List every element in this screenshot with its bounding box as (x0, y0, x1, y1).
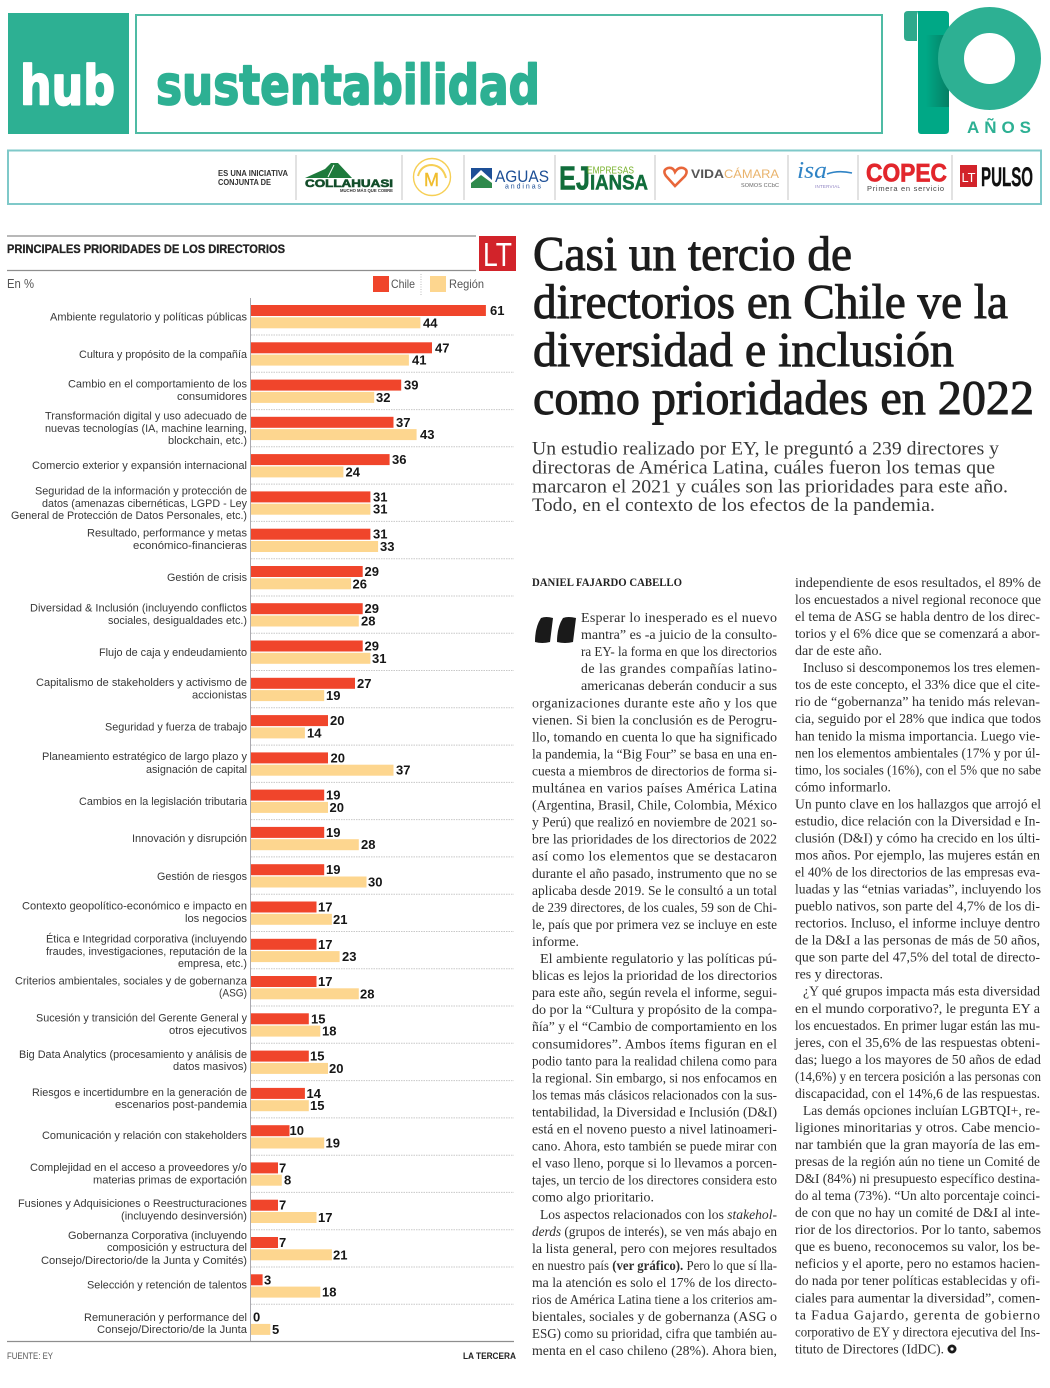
paragraph: Las demás opciones: D&I (84%) ni presupuesto específico destina- (795, 1172, 1040, 1187)
row: Riesgos e incertidumbre: Riesgos e incertidumbre en la generación de (32, 1087, 247, 1099)
row: Innovación y disrupción (132, 825, 375, 852)
paragraph: Las demás opciones: presas de la región aún no tiene un Comité de (795, 1155, 1040, 1170)
row: Selección y retención: Selección y retención de talentos (87, 1280, 247, 1292)
paragraph: Esperar lo inesperado: organizaciones durante este año y los que (532, 696, 777, 711)
paragraph: Un punto clave: luadas y las “etnias variadas”, incluyendo los (795, 883, 1041, 898)
row: Gobernanza Corporativa: Gobernanza Corporativa (incluyendo (68, 1230, 247, 1242)
row: Cambio en el comportamiento: 39 (404, 378, 418, 393)
paragraph: Esperar lo inesperado: americanas deberán conducir a sus (581, 679, 777, 694)
panel: bar chart of board priorities (7, 236, 516, 1361)
paragraph: Los aspectos relacionados: ma la atención es solo el 17% de los directo- (532, 1276, 777, 1291)
paragraph: El ambiente regulatorio: do por la “Cultura y propósito de la compa- (532, 1003, 777, 1018)
row: Gobernanza Corporativa: composición y estructura del (107, 1242, 247, 1254)
paragraph: Incluso si descomponemos: nen los elementos ambientales (17% y por úl- (795, 746, 1040, 761)
legend: Chile (391, 277, 415, 291)
row: Cambio en el comportamiento: Cambio en el comportamiento de los (68, 378, 247, 390)
row: Criterios ambientales: Criterios ambientales, sociales y de gobernanza (15, 976, 248, 988)
logo: Empresas Iansa: EJ (559, 160, 590, 196)
paragraph: Y qué grupos impacta: los encuestados. En primer lugar están las mu- (795, 1019, 1040, 1034)
paragraph: Esperar lo inesperado: (Argentina, Brasil, Chile, Colombia, México (532, 799, 777, 814)
row: Remuneración y performance: Consejo/Directorio/de la Junta (97, 1324, 248, 1336)
row: Planeamiento estratégico: Planeamiento estratégico de largo plazo y (42, 751, 247, 763)
row: Transformación digital: Transformación digital y uso adecuado de (45, 410, 247, 422)
paragraph: Esperar lo inesperado: mantra” es -a juicio de la consulto- (581, 628, 777, 643)
paragraph: El ambiente regulatorio: el vaso lleno, porque si lo llevamos a porcen- (532, 1157, 777, 1172)
row: Transformación digital (45, 410, 434, 447)
row: Gobernanza Corporativa: 7 (279, 1235, 286, 1250)
logo: ISA Intervial: INTERVIAL (815, 184, 840, 189)
paragraph: El ambiente regulatorio: blicas es lejos la prioridad de los directorios (532, 969, 777, 984)
row: Innovación y disrupción: 28 (361, 837, 375, 852)
header: hub sustentabilidad banner (8, 11, 1031, 137)
row: Fusiones y Adquisiciones: (incluyendo desinversión) (121, 1210, 247, 1222)
row: Gestión de riesgos: Gestión de riesgos (157, 871, 247, 883)
row: Cambios en la legislación: 19 (326, 788, 340, 803)
paragraph: Los aspectos relacionados: en nuestro país (ver gráfico). Pero lo que sí lla- (532, 1259, 777, 1274)
headline: Casi un tercio de (533, 226, 852, 281)
row: Gestión de riesgos (157, 862, 382, 890)
paragraph: Esperar lo inesperado (532, 611, 778, 950)
paragraph: Las demás opciones: Las demás opciones incluían LGBTQI+, re- (803, 1104, 1040, 1119)
logo: ISA Intervial (797, 158, 852, 189)
paragraph: El ambiente regulatorio: para este año, según revela el informe, segui- (532, 986, 777, 1001)
row: Innovación y disrupción: 19 (326, 825, 340, 840)
row: Big Data Analytics: 15 (310, 1049, 324, 1064)
row: Riesgos e incertidumbre (32, 1086, 324, 1113)
row: Gestión de riesgos: 30 (368, 874, 382, 890)
row: Sucesión y transición: 15 (311, 1011, 325, 1026)
row: Big Data Analytics: datos masivos) (173, 1061, 247, 1073)
hub logo box (8, 13, 129, 134)
paragraph: Esperar lo inesperado: durante el año pasado, instrumento que no se (532, 867, 777, 882)
row: Complejidad en el acceso (30, 1160, 291, 1188)
logo: Empresas Iansa: EMPRESAS (587, 166, 634, 176)
row: Ética e Integridad: empresa, etc.) (178, 958, 247, 970)
paragraph: Los aspectos relacionados: Los aspectos relacionados con los stakehol- (540, 1208, 777, 1223)
row: Remuneración y performance: Remuneración y performance del (84, 1312, 247, 1324)
logo: Collahuasi: COLLAHUASI (305, 178, 393, 190)
logo: Empresas Iansa (559, 160, 648, 196)
paragraph: Incluso si descomponemos: cia, seguido por el 28% que indica que todos (795, 712, 1041, 727)
row: Seguridad y fuerza de trabajo: 14 (307, 725, 322, 740)
paragraph: Un punto clave: que son parte del 47,5% del total de directo- (795, 951, 1040, 966)
row: Comunicación y relación: 10 (290, 1123, 304, 1138)
paragraph: Esperar lo inesperado: aplicaba desde 2019. Se le consultó a un total (532, 884, 777, 899)
row: Cultura y propósito: 41 (412, 353, 426, 368)
paragraph: El ambiente regulatorio: cano. Ahora, esto también se puede mirar con (532, 1140, 777, 1155)
paragraph: Los aspectos relacionados: derds (grupos de interés), se ven más abajo en (532, 1225, 777, 1240)
logo: LT Pulso: LT (962, 170, 976, 185)
sustentabilidad title box: sustentabilidad (156, 54, 540, 117)
row: Capitalismo de stakeholders (36, 676, 371, 703)
subheading: directoras de América Latina, cuáles fueron los temas que (532, 458, 995, 478)
row: Planeamiento estratégico (42, 750, 410, 778)
paragraph: independiente de esos resultados: dar de este año. (795, 644, 882, 659)
row: Remuneración y performance (84, 1310, 279, 1337)
paragraph: Un punto clave: pueblo nativos, son parte del 4,7% de los di- (795, 900, 1040, 915)
logo: Aguas Andinas (471, 168, 549, 190)
legend (373, 274, 484, 296)
paragraph: Incluso si descomponemos: Incluso si descomponemos los tres elemen- (803, 661, 1040, 676)
logo: McDonald's arches: M (424, 170, 439, 190)
row: Seguridad de la información: 31 (373, 489, 387, 504)
paragraph: El ambiente regulatorio: tajes, un tercio de los directores considera esto (532, 1174, 777, 1189)
row: Ética e Integridad: Ética e Integridad corporativa (incluyendo (46, 932, 247, 946)
paragraph: Y qué grupos impacta: das; luego a los mayores de 50 años de edad (795, 1053, 1041, 1068)
row: Ética e Integridad (46, 932, 356, 970)
text: es una iniciativa conjunta de (218, 168, 288, 187)
paragraph: El ambiente regulatorio (532, 952, 778, 1206)
row: Complejidad en el acceso: 8 (284, 1173, 291, 1188)
paragraph: Y qué grupos impacta: jeres, con el 35,6% de las respuestas obteni- (794, 1036, 1040, 1051)
paragraph: Las demás opciones: do al tema (73%). “Un alto porcentaje coinci- (795, 1189, 1040, 1204)
row: Gestión de crisis: 26 (352, 576, 367, 591)
row: Transformación digital: 37 (396, 415, 410, 430)
row: Transformación digital: nuevas tecnologías (IA, machine learning, (45, 423, 247, 435)
row: Resultado, performance (87, 527, 394, 554)
paragraph: Un punto clave: el 40% de los directorios de las empresas eva- (795, 866, 1040, 881)
logo: LT Pulso (960, 162, 1033, 192)
text: es una iniciativa conjunta de: CONJUNTA DE (218, 177, 271, 187)
paragraph: Las demás opciones: nar también que la gran mayoría de las em- (795, 1138, 1040, 1153)
row: Sucesión y transición: 18 (322, 1024, 336, 1039)
row: Fusiones y Adquisiciones (18, 1198, 332, 1225)
row: Comercio exterior: 24 (346, 464, 361, 479)
paragraph: independiente de esos resultados: los encuestados a nivel regional reconoce que (795, 593, 1041, 608)
article text: second column (794, 576, 1041, 1357)
headline: como prioridades en 2022 (533, 370, 1034, 425)
row: Flujo de caja (99, 638, 386, 666)
paragraph: independiente de esos resultados: torios y el 6% dice que se comenzará a abor- (795, 627, 1040, 642)
row: Seguridad y fuerza de trabajo: Seguridad y fuerza de trabajo (105, 722, 247, 734)
row: Flujo de caja: Flujo de caja y endeudamiento (99, 647, 247, 659)
row: Resultado, performance: 31 (373, 527, 387, 542)
row: Seguridad de la información: datos (amenazas cibernéticas, LGPD - Ley (42, 498, 247, 510)
row: Remuneración y performance: 0 (253, 1310, 260, 1325)
row: Contexto geopolítico: 21 (333, 912, 347, 927)
legend: Región (449, 277, 484, 291)
logo: Empresas Iansa: IANSA (590, 172, 648, 194)
row: Seguridad de la información: General de Protección de Datos Personales, etc.) (11, 510, 247, 522)
row: Resultado, performance: económico-financieras (133, 540, 248, 552)
row: Gestión de crisis: 29 (364, 564, 379, 579)
row: Riesgos e incertidumbre: escenarios post-pandemia (115, 1099, 248, 1111)
subheading (532, 439, 1008, 516)
paragraph: independiente de esos resultados (795, 576, 1041, 659)
paragraph: Incluso si descomponemos (795, 661, 1041, 795)
paragraph: Esperar lo inesperado: la pandemia, la “Big Four” se basa en una en- (532, 747, 777, 762)
paragraph: Un punto clave: Un punto clave en los hallazgos que arrojó el (795, 797, 1041, 812)
row: Sucesión y transición: Sucesión y transición del Gerente General y (36, 1012, 247, 1024)
row: Cambios en la legislación: Cambios en la legislación tributaria (79, 796, 248, 808)
paragraph: independiente de esos resultados: independiente de esos resultados, el 89% de (795, 576, 1041, 591)
row: Innovación y disrupción: Innovación y disrupción (132, 833, 247, 845)
paragraph: Esperar lo inesperado: vienen. Si bien la conclusión es de Perogru- (532, 713, 777, 728)
paragraph: El ambiente regulatorio: El ambiente regulatorio y las políticas pú- (540, 952, 777, 967)
row: Fusiones y Adquisiciones: Fusiones y Adquisiciones o Reestructuraciones (18, 1198, 247, 1210)
article text: first column (532, 611, 778, 1359)
row: Remuneración y performance: 5 (272, 1322, 279, 1337)
icon: 10 años anniversary logo (904, 11, 1031, 137)
row: Planeamiento estratégico: asignación de capital (146, 764, 247, 776)
row: Comercio exterior (32, 452, 406, 479)
row: Contexto geopolítico: 17 (318, 900, 332, 914)
paragraph: Un punto clave: de la D&I a las personas de más de 50 años, (795, 934, 1040, 949)
row: Ambiente regulatorio: 44 (423, 315, 438, 330)
row: Cambios en la legislación (79, 788, 344, 815)
paragraph: Las demás opciones: que es bueno, reconocemos su valor, los be- (795, 1240, 1040, 1255)
paragraph: El ambiente regulatorio: podio tanto para la realidad chilena como para (532, 1054, 778, 1069)
row: Sucesión y transición (36, 1011, 336, 1039)
row: Criterios ambientales: (ASG) (219, 988, 247, 1000)
row: Ambiente regulatorio (50, 303, 504, 330)
row: Resultado, performance: Resultado, performance y metas (87, 528, 247, 540)
row: Sucesión y transición: otros ejecutivos (169, 1025, 247, 1037)
paragraph: Y qué grupos impacta: ¿Y qué grupos impacta más esta diversidad (803, 985, 1040, 1000)
logo: Aguas Andinas: andinas (505, 184, 542, 190)
row: Diversidad e Inclusión: 28 (361, 614, 375, 628)
logo: Aguas Andinas: AGUAS (495, 168, 549, 186)
paragraph: Las demás opciones: do nada por tener políticas establecidas y ofi- (795, 1274, 1040, 1289)
paragraph: Las demás opciones: rior de los directorios. Por lo tanto, sabemos (795, 1223, 1041, 1238)
headline: diversidad e inclusión (533, 322, 954, 377)
row: Big Data Analytics: Big Data Analytics (procesamiento y análisis de (19, 1049, 247, 1061)
row: Cultura y propósito: 47 (435, 340, 449, 355)
paragraph: Los aspectos relacionados: menta en el caso chileno (28%). Ahora bien, (532, 1344, 777, 1359)
row: Transformación digital: 43 (420, 427, 434, 442)
paragraph: Esperar lo inesperado: así como los elementos que se destacaron (532, 850, 777, 865)
paragraph: Los aspectos relacionados: bientales, sociales y de gobernanza (ASG o (532, 1310, 777, 1325)
row: Planeamiento estratégico: 37 (396, 763, 410, 778)
icon: 10 años anniversary logo: AÑOS (967, 117, 1031, 137)
paragraph: Incluso si descomponemos: cómo informarlo. (795, 780, 891, 795)
logo: Vida Cámara: VIDA (691, 167, 724, 181)
paragraph: Las demás opciones: neficios y el aporte, pero no estamos hacien- (795, 1257, 1040, 1272)
unit label: En % (7, 276, 34, 291)
row: Cultura y propósito (79, 340, 449, 368)
paragraph: independiente de esos resultados: el tema de ASG se habla dentro de los direc- (795, 610, 1040, 625)
paragraph: Esperar lo inesperado: de las grandes compañías latino- (581, 662, 777, 677)
hub logo box: hub (20, 54, 115, 118)
logo: Vida Cámara: SOMOS CCbC (741, 183, 779, 189)
row: Gobernanza Corporativa: 21 (333, 1247, 347, 1262)
paragraph: Y qué grupos impacta: discapacidad, con el 14%,6 de las respuestas. (795, 1087, 1040, 1102)
logo: Copec: Primera en servicio (867, 184, 944, 193)
row: Cambio en el comportamiento (68, 378, 418, 405)
row: Ética e Integridad: 17 (318, 937, 332, 952)
row: Criterios ambientales (15, 974, 374, 1001)
paragraph: El ambiente regulatorio: como algo prioritario. (532, 1191, 654, 1206)
row: Cultura y propósito: Cultura y propósito de la compañía (79, 349, 248, 361)
logo: Vida Cámara: CÁMARA (724, 166, 779, 181)
paragraph: Los aspectos relacionados: ESG) como su prioridad, cifra que también au- (532, 1327, 777, 1342)
row: Diversidad e Inclusión: 29 (364, 601, 379, 616)
row: Contexto geopolítico: los negocios (185, 913, 248, 925)
row: Comercio exterior: 36 (392, 452, 406, 467)
paragraph: Y qué grupos impacta (794, 985, 1041, 1102)
source note: FUENTE: EY (7, 1351, 53, 1361)
row: Complejidad en el acceso: Complejidad en el acceso a proveedores y/o (30, 1162, 247, 1174)
row: Diversidad e Inclusión (30, 601, 379, 628)
row: Diversidad e Inclusión: sociales, desigualdades etc.) (108, 615, 247, 627)
headline: directorios en Chile ve la (533, 274, 1008, 329)
row: Comunicación y relación: 19 (326, 1136, 340, 1150)
credit: La Tercera: LA TERCERA (463, 1351, 516, 1361)
row: Flujo de caja: 31 (372, 651, 386, 666)
row: Diversidad e Inclusión: Diversidad & Inclusión (incluyendo conflictos (30, 602, 247, 614)
paragraph: Esperar lo inesperado: le, país que por primera vez se incluye en este (532, 918, 777, 933)
icon: La Tercera LT badge: LT (483, 236, 512, 273)
paragraph: Esperar lo inesperado: informe. (532, 935, 579, 950)
row: Big Data Analytics: 20 (329, 1061, 343, 1076)
sustentabilidad title box (136, 15, 882, 133)
row: Seguridad de la información (11, 486, 387, 522)
paragraph: Incluso si descomponemos: rio de “gobernanza” ha tenido más relevan- (795, 695, 1040, 710)
icon: end-of-article mark (948, 1344, 956, 1354)
row: Capitalismo de stakeholders: accionistas (192, 690, 247, 702)
row: Cambio en el comportamiento: consumidores (177, 391, 248, 403)
text: es una iniciativa conjunta de: ES UNA INICIATIVA (218, 168, 288, 178)
row: Planeamiento estratégico: 20 (330, 750, 345, 765)
logo: ISA Intervial: isa (797, 158, 827, 184)
paragraph: Las demás opciones: ta Fadua Gajardo, gerenta de gobierno (795, 1308, 1040, 1323)
paragraph: Esperar lo inesperado: y Perú) que realizó en noviembre de 2021 so- (532, 816, 777, 831)
logo: Collahuasi (305, 163, 393, 193)
paragraph: Esperar lo inesperado: de 239 directores, de los cuales, 59 son de Chi- (532, 901, 777, 916)
row: Seguridad de la información: 31 (373, 502, 387, 517)
paragraph: Las demás opciones: ciales para aumentar la diversidad”, comen- (795, 1291, 1040, 1306)
row: Gestión de riesgos: 19 (326, 862, 340, 877)
row: Riesgos e incertidumbre: 14 (306, 1086, 322, 1101)
paragraph: Un punto clave (795, 797, 1041, 983)
paragraph: Las demás opciones: de con que no hay un comité de D&I al inte- (795, 1206, 1040, 1221)
row: Cambio en el comportamiento: 32 (376, 390, 390, 405)
paragraph: Un punto clave: estudio, dice relación con la Diversidad e In- (795, 814, 1040, 829)
paragraph: El ambiente regulatorio: consumidores”. Ambos ítems figuran en el (532, 1037, 777, 1052)
icon: opening quotation mark (535, 617, 576, 643)
paragraph: El ambiente regulatorio: tentabilidad, la Diversidad e Inclusión (D&I) (532, 1105, 777, 1120)
paragraph: Esperar lo inesperado: ra EY- la forma en que los directorios (581, 645, 777, 660)
sponsors strip (8, 150, 1041, 204)
paragraph: Esperar lo inesperado: Esperar lo inesperado es el nuevo (581, 611, 777, 626)
headline (533, 226, 1034, 425)
paragraph: Un punto clave: clusión (D&I) y cómo ha crecido en los últi- (795, 831, 1040, 846)
row: Gestión de crisis: Gestión de crisis (167, 572, 247, 584)
row: Comunicación y relación (42, 1123, 340, 1150)
logo: Collahuasi: MUCHO MÁS QUE COBRE (340, 187, 393, 193)
row: Selección y retención (87, 1272, 336, 1300)
byline: DANIEL FAJARDO CABELLO (532, 575, 682, 589)
paragraph: Incluso si descomponemos: tos de este concepto, el 33% dice que el cite- (795, 678, 1040, 693)
subheading: marcaron el 2021 y cuáles son las prioridades para este año. (532, 477, 1008, 497)
chart heading: PRINCIPALES PRIORIDADES DE LOS DIRECTORIOS (7, 242, 285, 256)
paragraph: Las demás opciones: ligiones minoritarias y otros. Cabe mencio- (795, 1121, 1040, 1136)
row: Flujo de caja: 29 (364, 638, 379, 654)
paragraph: Los aspectos relacionados (532, 1208, 777, 1359)
paragraph: Esperar lo inesperado: multánea en varios países América Latina (532, 782, 778, 796)
row: Seguridad y fuerza de trabajo (105, 713, 344, 740)
row: Seguridad y fuerza de trabajo: 20 (330, 713, 344, 728)
paragraph: Los aspectos relacionados: la lista general, pero con mejores resultados (532, 1242, 777, 1257)
row: Fusiones y Adquisiciones: 7 (279, 1198, 286, 1213)
row: Complejidad en el acceso: 7 (279, 1160, 286, 1175)
row: Ambiente regulatorio: Ambiente regulatorio y políticas públicas (50, 312, 247, 324)
row: Riesgos e incertidumbre: 15 (310, 1098, 324, 1113)
paragraph: Esperar lo inesperado: llo, tomando en cuenta lo que ha significado (532, 730, 777, 745)
paragraph: El ambiente regulatorio: la regional. Sin embargo, si nos enfocamos en (532, 1071, 777, 1086)
paragraph: Un punto clave: mos años. Por ejemplo, las mujeres están en (795, 848, 1040, 863)
logo: Copec: COPEC (866, 160, 947, 188)
row: Ética e Integridad: fraudes, investigaciones, reputación de la (46, 946, 248, 958)
row: Fusiones y Adquisiciones: 17 (318, 1210, 332, 1225)
row: Gobernanza Corporativa (41, 1230, 347, 1267)
row: Resultado, performance: 33 (380, 539, 394, 554)
row: Gestión de crisis (167, 564, 379, 591)
paragraph: Un punto clave: rectorios. Incluso, el informe incluye dentro (795, 917, 1040, 932)
paragraph: El ambiente regulatorio: está en el noveno puesto a nivel latinoameri- (532, 1122, 777, 1138)
paragraph: Los aspectos relacionados: rios de América Latina tiene a los criterios am- (532, 1293, 777, 1308)
paragraph: Incluso si descomponemos: han tenido la misma importancia. Luego vie- (795, 729, 1040, 744)
row: Selección y retención: 3 (264, 1272, 271, 1287)
logo: Vida Cámara (664, 166, 779, 189)
row: Ambiente regulatorio: 61 (490, 303, 504, 318)
paragraph: El ambiente regulatorio: los temas más clásicos relacionados con la sus- (532, 1088, 777, 1103)
paragraph: Y qué grupos impacta: en el mundo corporativo?, le pregunta EY a (795, 1002, 1041, 1017)
row: Selección y retención: 18 (322, 1285, 336, 1300)
row: Capitalismo de stakeholders: 19 (326, 688, 340, 703)
row: Comunicación y relación: Comunicación y relación con stakeholders (42, 1130, 247, 1142)
subheading: Todo, en el contexto de los efectos de la pandemia. (532, 496, 935, 516)
row: Contexto geopolítico: Contexto geopolítico-económico e impacto en (22, 900, 247, 912)
paragraph: El ambiente regulatorio: ñía” y el “Cambio de comportamiento en los (532, 1020, 777, 1035)
paragraph: Las demás opciones: tituto de Directores (IdDC). (795, 1342, 944, 1357)
row: Gobernanza Corporativa: Consejo/Directorio/de la Junta y Comités) (41, 1255, 247, 1267)
row: Ética e Integridad: 23 (342, 949, 356, 964)
logo: McDonald's arches (414, 158, 450, 196)
row: Criterios ambientales: 17 (318, 974, 332, 989)
row: Capitalismo de stakeholders: 27 (357, 676, 371, 691)
paragraph: Un punto clave: res y directoras. (795, 968, 883, 983)
row: Transformación digital: blockchain, etc.) (168, 435, 247, 447)
row: Seguridad de la información: Seguridad de la información y protección de (35, 486, 247, 498)
row: Comercio exterior: Comercio exterior y expansión internacional (32, 460, 247, 472)
row: Criterios ambientales: 28 (360, 986, 374, 1001)
row: Capitalismo de stakeholders: Capitalismo de stakeholders y activismo de (36, 677, 247, 689)
row: Big Data Analytics (19, 1049, 343, 1076)
row: Contexto geopolítico (22, 900, 347, 927)
subheading: Un estudio realizado por EY, le preguntó a 239 directores y (532, 439, 1000, 459)
paragraph: Esperar lo inesperado: cuesta a miembros de directorios de forma si- (532, 764, 777, 779)
paragraph: Las demás opciones (795, 1104, 1041, 1357)
row: Cambios en la legislación: 20 (330, 800, 344, 815)
row: Complejidad en el acceso: materias primas de exportación (93, 1174, 247, 1186)
paragraph: Esperar lo inesperado: bre las prioridades de los directorios de 2022 (532, 833, 777, 848)
